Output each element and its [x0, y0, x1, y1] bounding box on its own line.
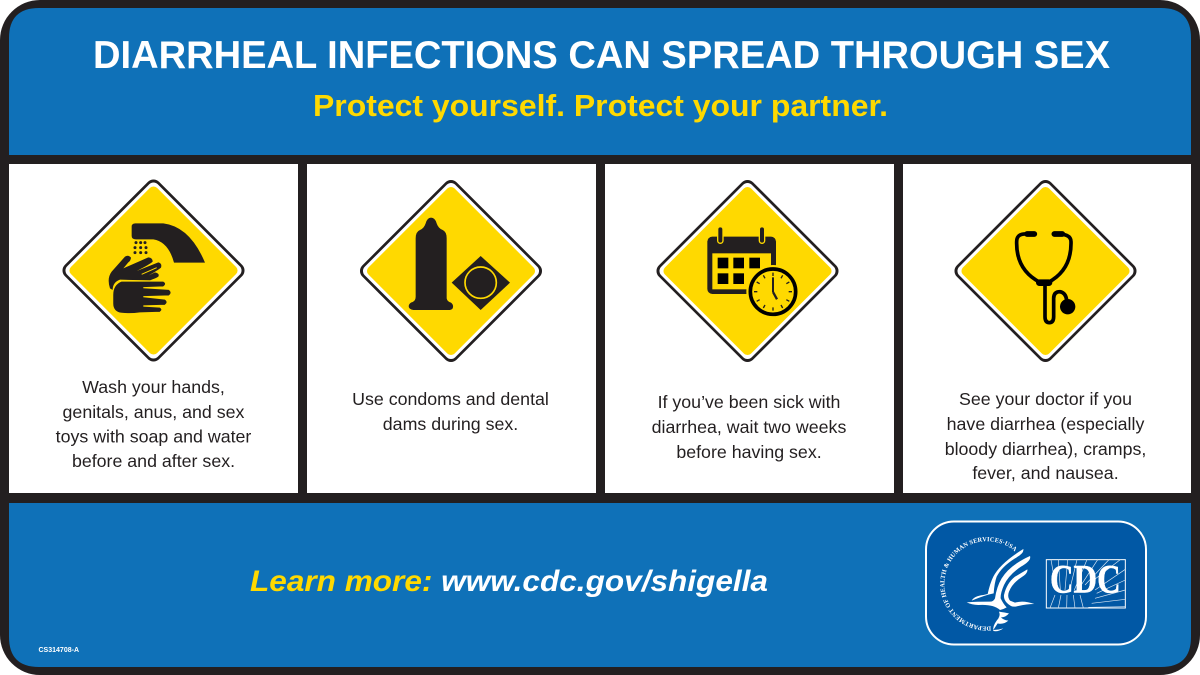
panel: wait two weeks — [605, 164, 894, 493]
text: see doctor: fever, and nausea. — [972, 463, 1119, 483]
learn more link: Learn more: www.cdc.gov/shigella — [250, 565, 768, 598]
panel: condoms — [307, 164, 596, 493]
text: see doctor: See your doctor if you — [959, 389, 1132, 409]
text: wash hands: genitals, anus, and sex — [63, 402, 245, 422]
text: wait two weeks: If you’ve been sick with — [658, 392, 840, 412]
title: DIARRHEAL INFECTIONS CAN SPREAD THROUGH SEX — [93, 34, 1110, 77]
text: wash hands: Wash your hands, — [82, 377, 225, 397]
footer band — [9, 503, 1191, 667]
icon: hand washing sign — [59, 176, 248, 365]
header band — [9, 8, 1191, 155]
text: condoms: Use condoms and dental — [352, 389, 549, 409]
text: see doctor: bloody diarrhea), cramps, — [945, 439, 1146, 459]
icon: stethoscope sign — [951, 177, 1140, 365]
text: wash hands: before and after sex. — [72, 451, 235, 471]
text: condoms: dams during sex. — [383, 414, 518, 434]
text: wash hands: toys with soap and water — [56, 426, 251, 446]
icon: condom sign — [357, 177, 545, 365]
text: wait two weeks: diarrhea, wait two weeks — [652, 417, 846, 437]
CDC mark: CDC — [1050, 557, 1121, 602]
subtitle: Protect yourself. Protect your partner. — [313, 88, 888, 123]
publication code: CS314708-A — [38, 645, 80, 654]
panel: see doctor — [903, 164, 1191, 493]
icon: calendar and clock sign — [653, 177, 842, 365]
HHS seal: DEPARTMENT OF HEALTH & HUMAN SERVICES·USA — [940, 537, 1016, 631]
panel: wash hands — [9, 164, 298, 493]
text: see doctor: have diarrhea (especially — [947, 414, 1144, 434]
text: wait two weeks: before having sex. — [676, 442, 822, 462]
logo: HHS and CDC — [925, 520, 1147, 646]
